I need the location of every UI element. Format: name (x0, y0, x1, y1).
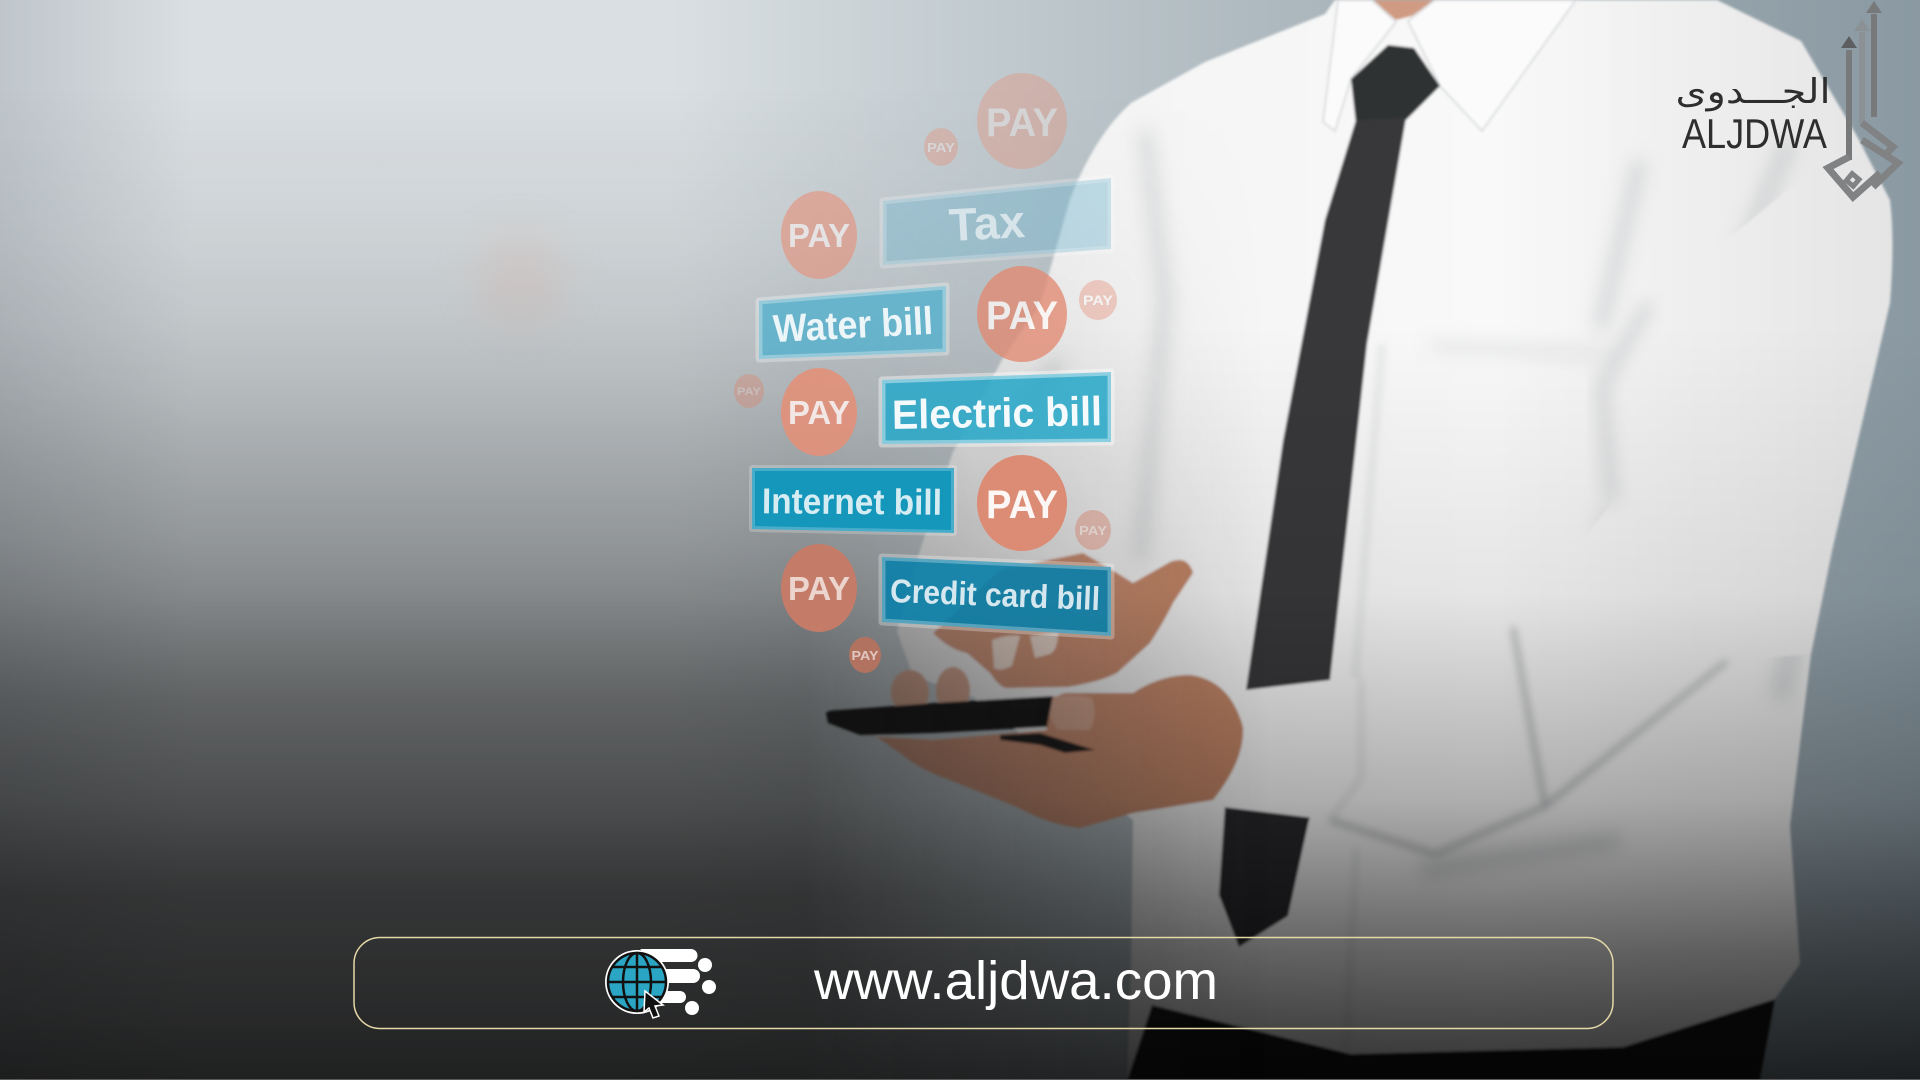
pay button: bottom small (849, 637, 881, 673)
pay button: top large: PAY (986, 101, 1058, 145)
tag: Water bill (759, 286, 946, 359)
pay button: row 5: PAY (788, 570, 850, 607)
thumb nail (1049, 695, 1095, 730)
dark left overlay (0, 180, 1225, 1079)
tag: Internet bill: Internet bill (762, 480, 942, 523)
logo arrows (1841, 1, 1882, 160)
tie (1219, 45, 1440, 947)
fingertips (992, 632, 1058, 670)
faint ghost circle (475, 232, 565, 328)
tag: Credit card bill: Credit card bill (889, 572, 1101, 617)
phone shadow (1000, 733, 1095, 753)
pay button: tiny left (734, 374, 764, 408)
shirt folds (1000, 130, 1830, 870)
fingers behind phone (891, 667, 970, 714)
neck (1372, 0, 1435, 20)
bottom edge line (0, 1079, 1920, 1080)
cursor (644, 991, 663, 1018)
pay button: tiny right: PAY (1083, 292, 1114, 308)
belt and trousers (1127, 999, 1775, 1080)
pay button: tiny left: PAY (737, 386, 762, 398)
logo arabic wordmark: الجـــدوى (1676, 72, 1830, 112)
logo: ALJDWA (1676, 1, 1898, 197)
pay button: row 1 (781, 191, 857, 279)
logo latin wordmark: ALJDWA (1682, 110, 1827, 157)
website url: www.aljdwa.com (813, 951, 1218, 1011)
bar outline (354, 938, 1613, 1028)
website bar (354, 938, 1613, 1028)
sleeve and cuff (1215, 180, 1890, 854)
placket (1346, 344, 1382, 1050)
pay button: row 3 (781, 368, 857, 456)
globe (605, 950, 669, 1014)
shirt body (897, 0, 1892, 1080)
pay button: top large (977, 73, 1067, 169)
phone (826, 696, 1053, 735)
pay button: bottom small: PAY (852, 648, 879, 663)
pay button: tiny right (1079, 280, 1117, 320)
pay button: row 3: PAY (788, 394, 850, 431)
bill tags and pay buttons (734, 73, 1117, 673)
tag: Internet bill (752, 468, 954, 533)
tag: Electric bill (882, 372, 1111, 444)
tag: Water bill: Water bill (772, 300, 934, 351)
logo kufic mark (1828, 123, 1898, 197)
pay button: tiny hand: PAY (1079, 523, 1107, 538)
photo: businessman (826, 0, 1892, 1080)
pay button: row 2 (977, 266, 1067, 362)
speed bars (640, 949, 716, 1015)
pay button: top small: PAY (927, 140, 955, 155)
tag: Tax: Tax (948, 195, 1027, 251)
pay button: row 4 (977, 455, 1067, 551)
pay button: row 4: PAY (986, 483, 1058, 527)
tag: Electric bill: Electric bill (892, 388, 1102, 438)
pay button: tiny hand (1075, 510, 1111, 550)
icon: globe with cursor (605, 949, 716, 1018)
pay button: top small (924, 128, 958, 166)
upper hand (933, 553, 1193, 688)
pay button: row 5 (781, 544, 857, 632)
tag: Credit card bill (882, 557, 1111, 636)
collar (1323, 0, 1576, 131)
tag: Tax (883, 178, 1111, 265)
pay button: row 2: PAY (986, 294, 1058, 338)
lower hand (877, 675, 1243, 828)
pay button: row 1: PAY (788, 217, 850, 254)
